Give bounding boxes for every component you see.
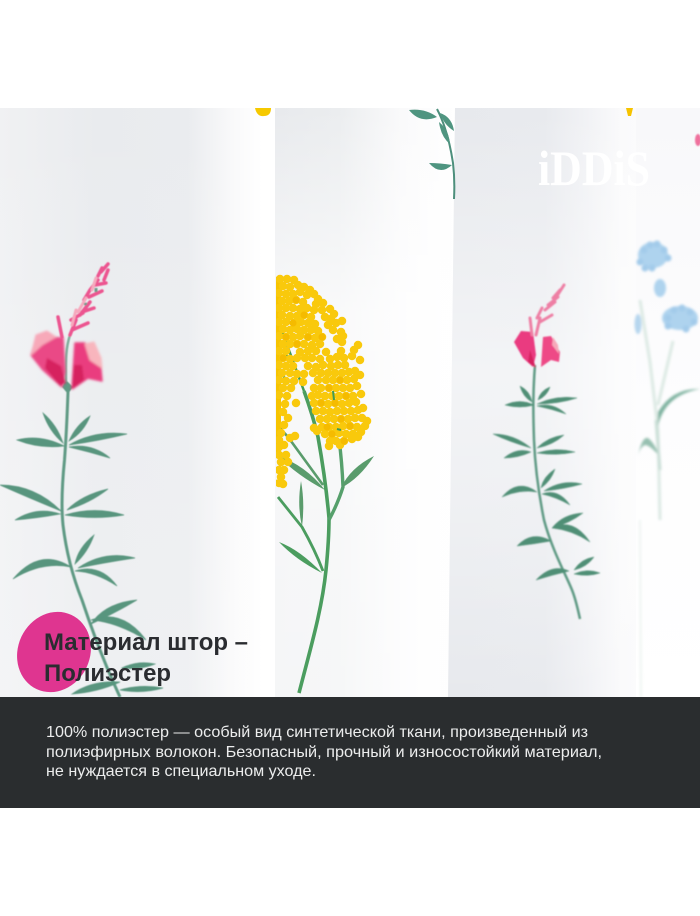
heading: Полиэстер (44, 660, 171, 687)
accent circle (4, 600, 104, 704)
dark description band (0, 697, 700, 808)
description text: не нуждается в специальном уходе. (46, 763, 316, 780)
flower: yellow mimosa sprig (276, 277, 374, 693)
heading: Материал штор – (44, 629, 248, 656)
mimosa blossoms (276, 277, 281, 457)
flower: right pink snapdragon (493, 285, 600, 619)
stems and leaves (278, 326, 374, 693)
logo: IDDIS: iDDiS (538, 140, 650, 196)
petal fragments at fold edges (255, 108, 700, 146)
description text: 100% полиэстер — особый вид синтетической ткани, произведенный из (46, 724, 588, 741)
flower: left pink snapdragon (0, 264, 163, 697)
curtain photo background (0, 108, 700, 697)
sprig: top green fold fragment (409, 109, 454, 199)
description text: полиэфирных волокон. Безопасный, прочный и износостойкий материал, (46, 744, 602, 761)
petals (31, 331, 102, 389)
flower: pale blue forget-me-not (634, 242, 700, 697)
